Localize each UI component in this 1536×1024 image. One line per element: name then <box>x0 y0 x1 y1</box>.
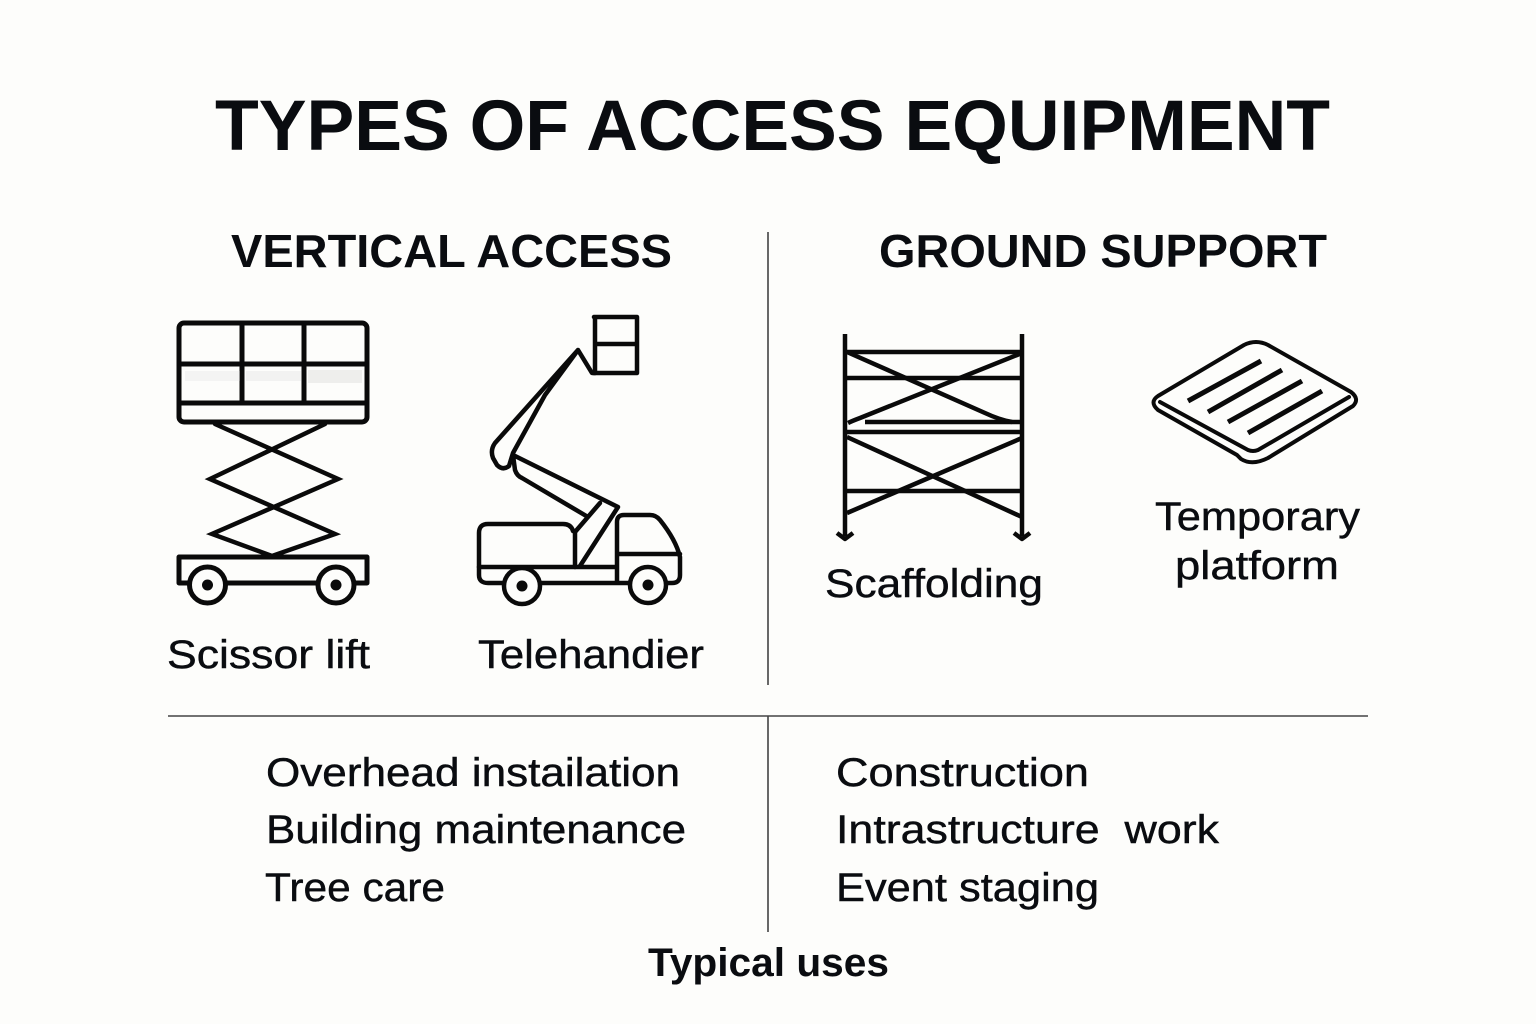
label: scissor lift: Scissor lift <box>167 633 370 677</box>
heading: vertical access: VERTICAL ACCESS <box>231 225 672 277</box>
text block: vertical access uses: Building maintenance <box>266 808 686 852</box>
title: TYPES OF ACCESS EQUIPMENT <box>215 87 1330 166</box>
icon: temporary platform <box>1154 342 1356 462</box>
label: scaffolding: Scaffolding <box>825 562 1043 606</box>
text block: vertical access uses <box>265 751 686 910</box>
text block: ground support uses: Event staging <box>836 866 1099 910</box>
icon: scissor lift <box>179 323 367 603</box>
text block: ground support uses: Intrastructure work <box>836 808 1220 852</box>
text block: vertical access uses: Tree care <box>265 866 445 910</box>
label: temporary platform <box>1155 495 1360 588</box>
text block: ground support uses <box>836 751 1220 910</box>
icon: telehandler <box>479 317 680 604</box>
caption: typical uses: Typical uses <box>648 941 889 985</box>
text block: vertical access uses: Overhead instailation <box>266 751 680 795</box>
heading: ground support: GROUND SUPPORT <box>879 225 1327 277</box>
label: temporary platform: Temporary <box>1155 495 1360 539</box>
text block: ground support uses: Construction <box>836 751 1089 795</box>
icon: scaffolding <box>837 334 1030 539</box>
label: telehandler: Telehandier <box>478 633 704 677</box>
label: temporary platform: platform <box>1175 544 1339 588</box>
